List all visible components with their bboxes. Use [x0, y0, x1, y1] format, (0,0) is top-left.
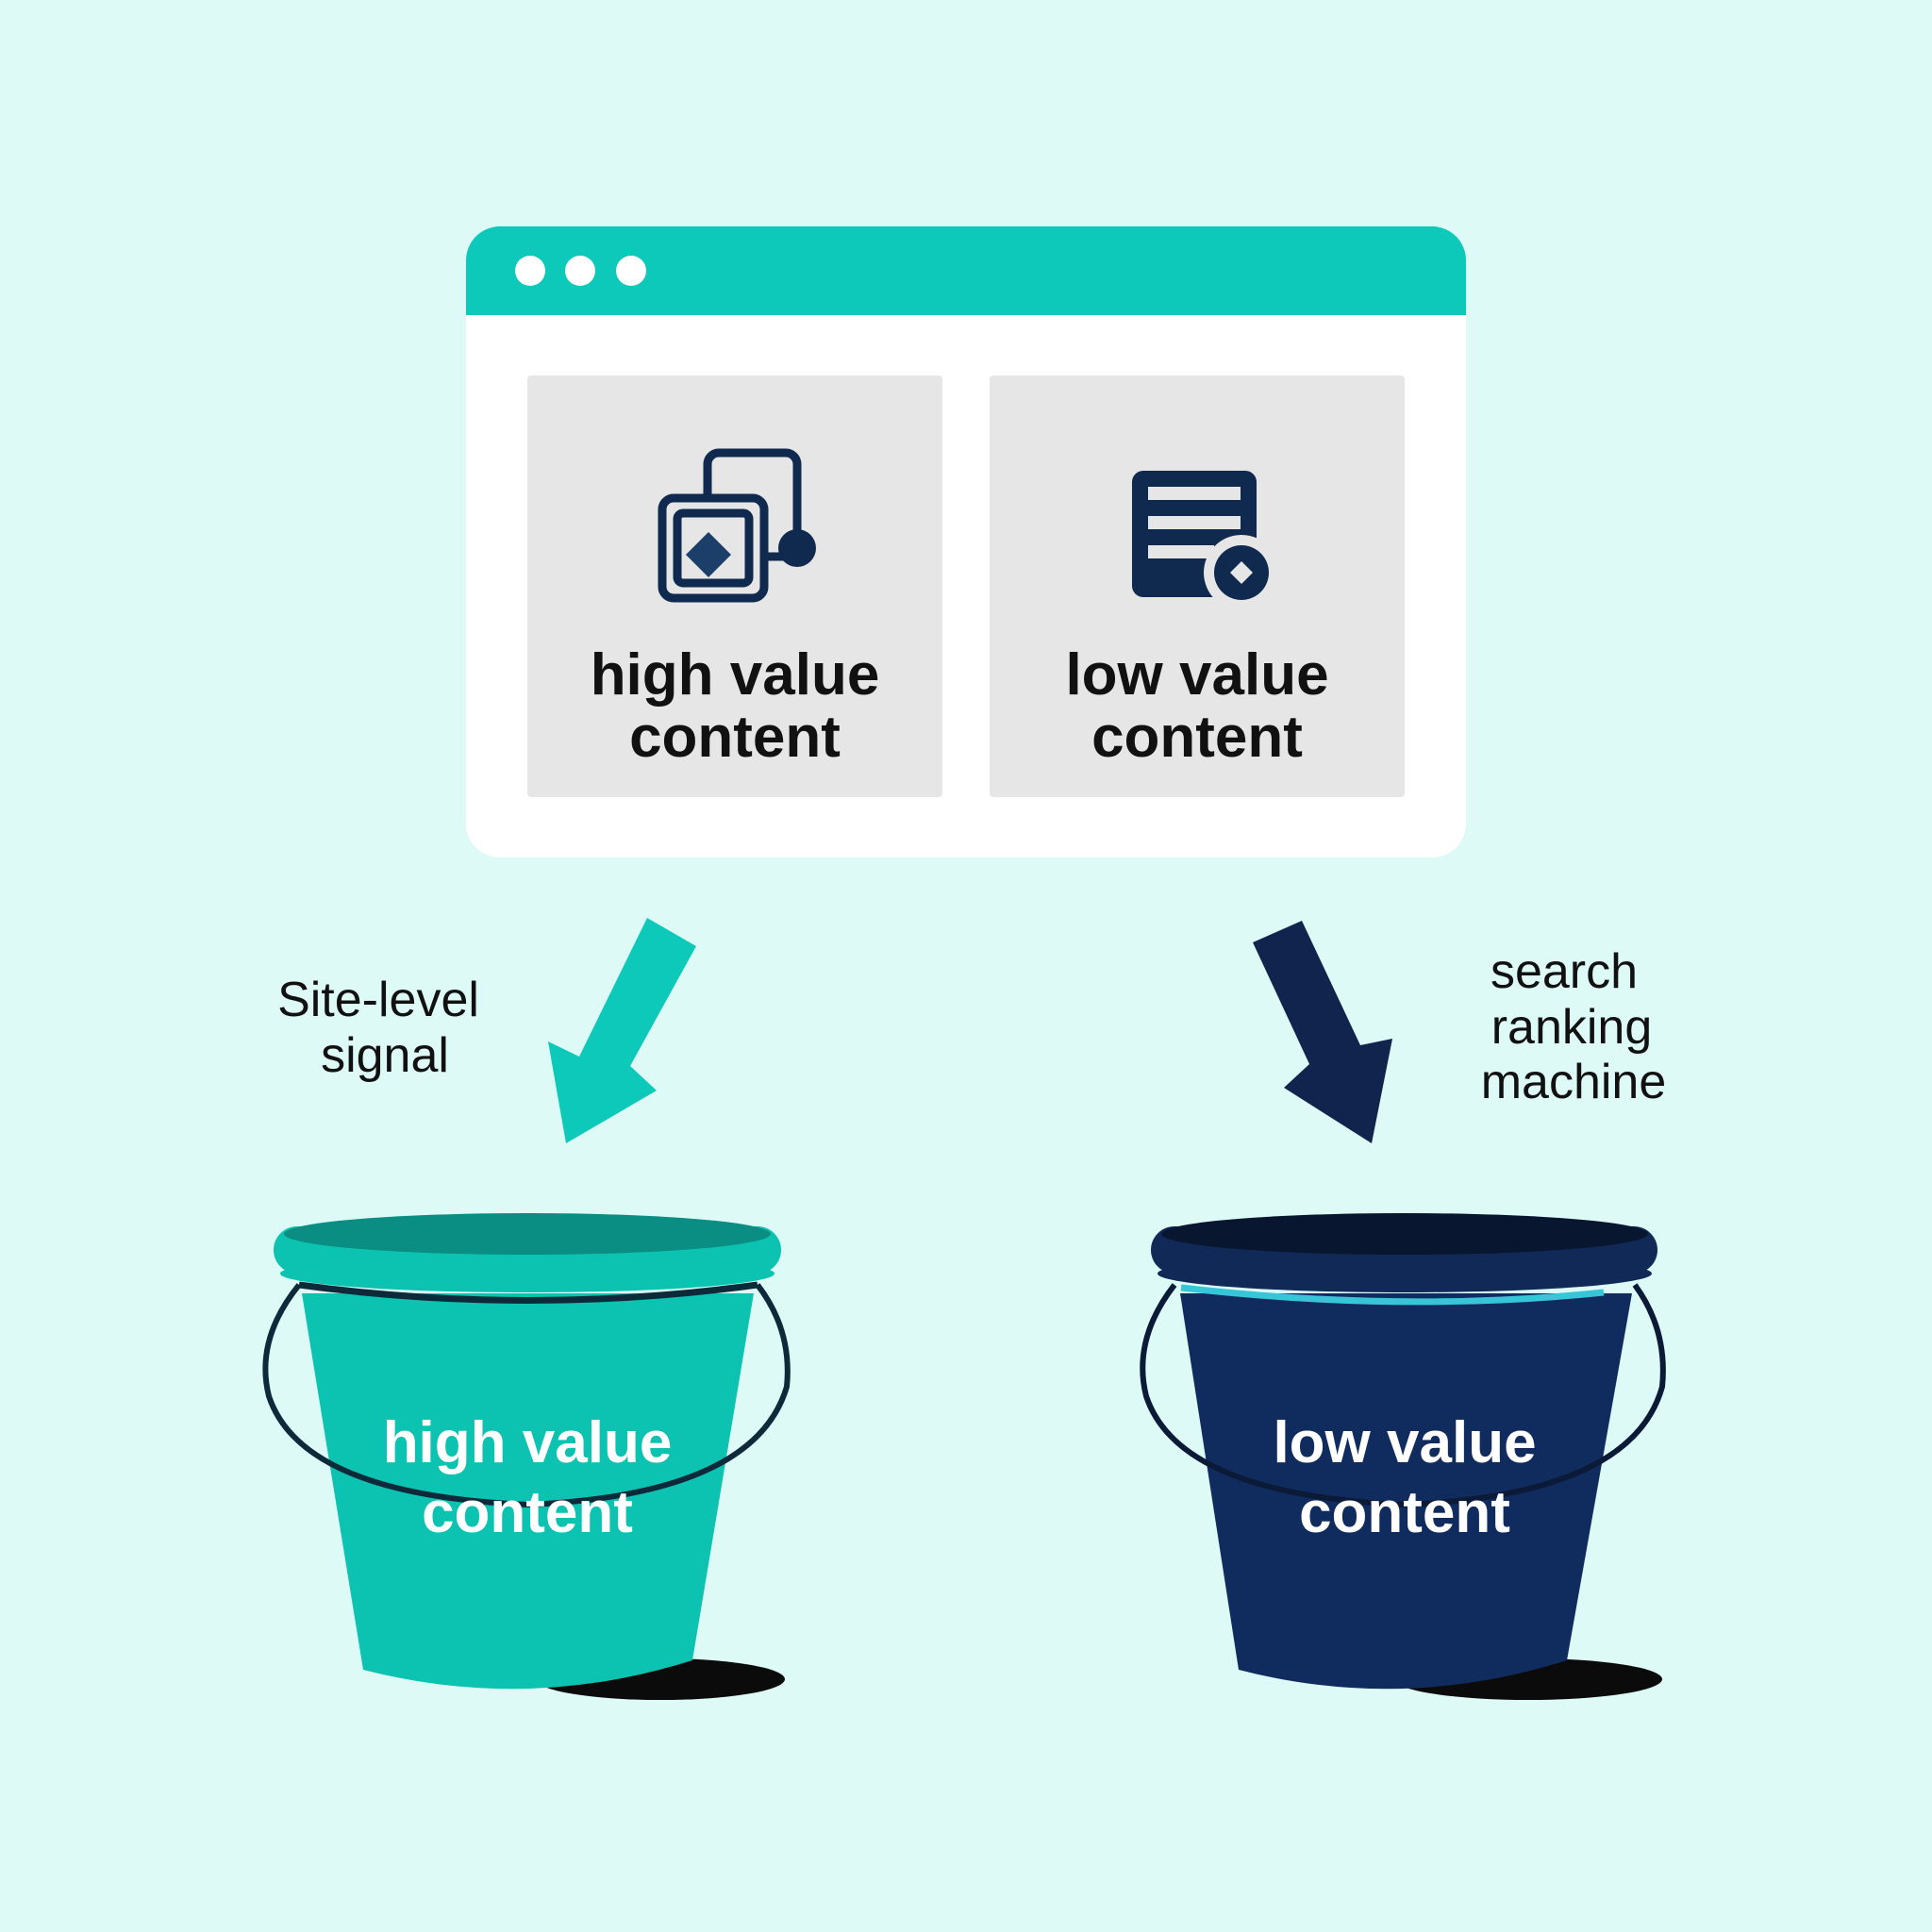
label: site-level signal: signal [321, 1028, 449, 1083]
label: search ranking machine: search [1491, 944, 1638, 999]
panel: low value content: content [1091, 705, 1303, 770]
icon: linked squares [662, 453, 797, 598]
label: site-level signal: Site-level [277, 973, 479, 1027]
panel: high value content: high value [591, 642, 879, 708]
arrow: navy right [1253, 921, 1392, 1143]
bucket: low value: low value [1273, 1410, 1537, 1475]
title bar [466, 226, 1466, 315]
browser window [466, 226, 1466, 858]
arrow: teal left [548, 918, 696, 1143]
bucket: high value: high value [383, 1410, 672, 1475]
icon: document with badge [1132, 471, 1279, 610]
bucket: high value [265, 1213, 788, 1700]
label: search ranking machine [1481, 944, 1666, 1109]
label: search ranking machine: ranking [1491, 1000, 1652, 1055]
bucket: low value [1142, 1213, 1663, 1700]
panel: low value content: low value [1065, 642, 1329, 708]
bucket: low value: content [1299, 1480, 1510, 1545]
label: site-level signal [277, 973, 479, 1083]
panel: high value content [527, 375, 942, 797]
label: search ranking machine: machine [1481, 1055, 1666, 1109]
panel: low value content [990, 375, 1405, 797]
panel: high value content: content [629, 705, 841, 770]
window dots [515, 256, 646, 286]
bucket: high value: content [422, 1480, 633, 1545]
